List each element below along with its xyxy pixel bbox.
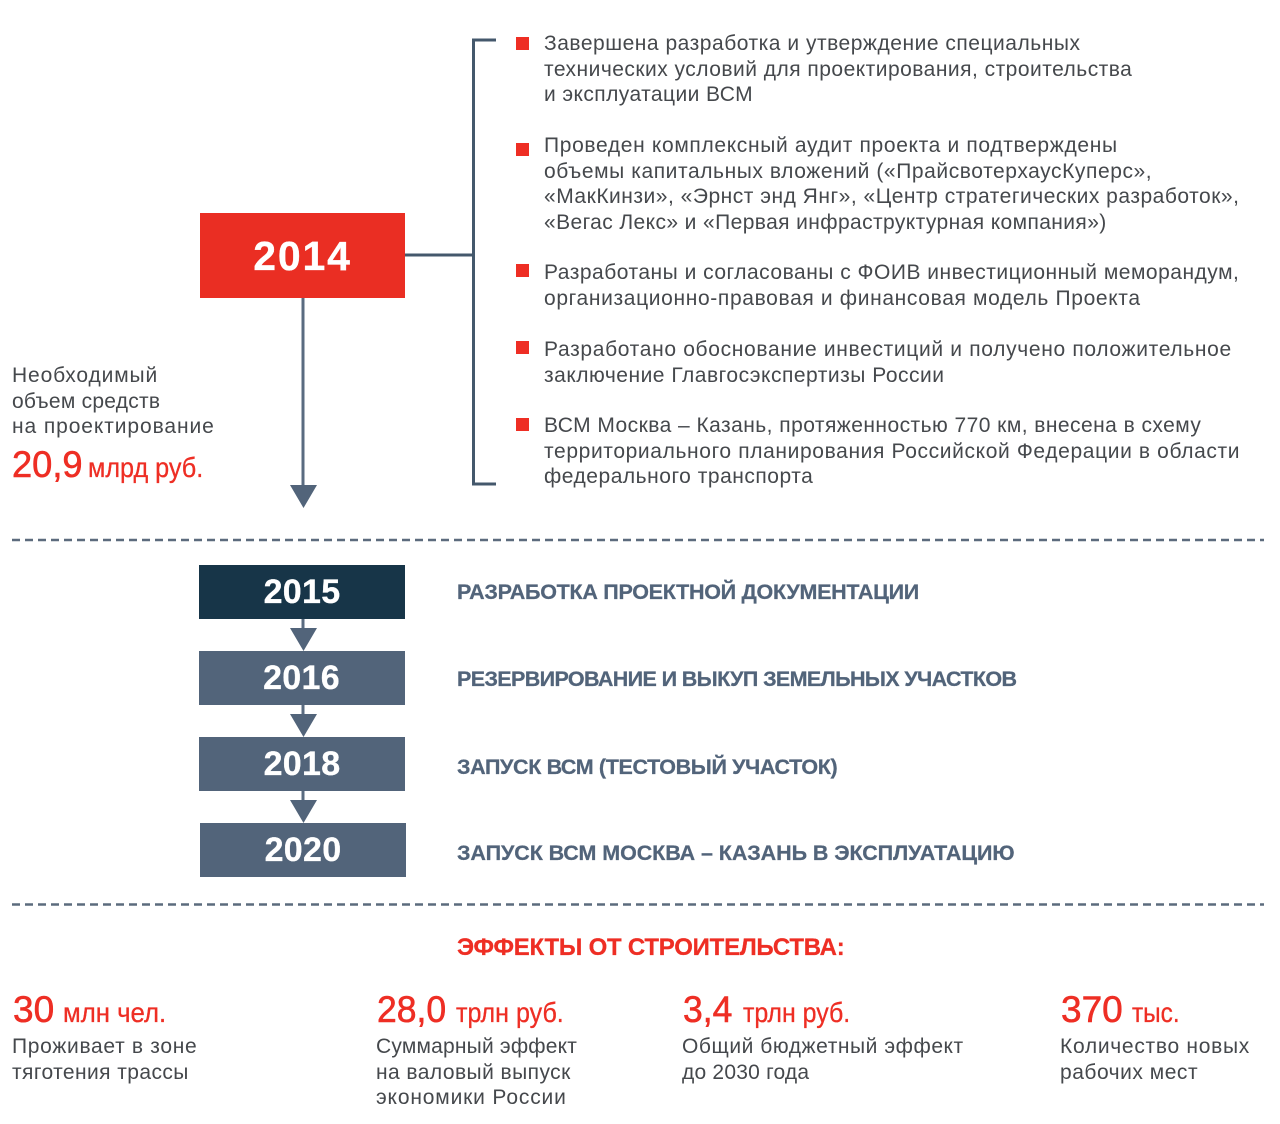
text 5: территориального планирования Российской Федерации в области bbox=[544, 440, 1240, 462]
effect text 2: на валовый выпуск bbox=[376, 1060, 571, 1084]
effect value 4: тыс. bbox=[1132, 997, 1180, 1028]
text 4: заключение Главгосэкспертизы России bbox=[544, 364, 945, 386]
effect text 1: тяготения трассы bbox=[12, 1060, 189, 1084]
effect text 3: Общий бюджетный эффект bbox=[682, 1035, 964, 1058]
milestone 2015: РАЗРАБОТКА ПРОЕКТНОЙ ДОКУМЕНТАЦИИ bbox=[457, 580, 919, 604]
effect text 4: рабочих мест bbox=[1060, 1060, 1198, 1084]
effect value 2: 28,0 bbox=[377, 989, 446, 1030]
text 4: Разработано обоснование инвестиций и получено положительное bbox=[544, 338, 1232, 361]
year box 2018 bbox=[199, 737, 405, 791]
bullet 2 bbox=[516, 143, 528, 156]
year box 2020: 2020 bbox=[265, 831, 341, 869]
effect text 3: до 2030 года bbox=[682, 1060, 809, 1084]
effect text 4 bbox=[1060, 1035, 1250, 1084]
effect value 2: трлн руб. bbox=[456, 997, 564, 1028]
effect text 1 bbox=[12, 1035, 197, 1084]
effect value 2 bbox=[377, 989, 564, 1030]
text 2: объемы капитальных вложений («ПрайсвотерхаусКуперс», bbox=[544, 160, 1152, 182]
bullet 3 bbox=[516, 264, 528, 276]
funding label: Необходимый bbox=[12, 364, 158, 387]
funding label: на проектирование bbox=[12, 415, 215, 438]
effect text 2 bbox=[376, 1035, 577, 1109]
funding label bbox=[12, 364, 215, 438]
effect text 1: Проживает в зоне bbox=[12, 1035, 197, 1058]
effect value 1: млн чел. bbox=[63, 997, 166, 1028]
milestone 2020: ЗАПУСК ВСМ МОСКВА – КАЗАНЬ В ЭКСПЛУАТАЦИЮ bbox=[457, 841, 1014, 865]
text 3: организационно-правовая и финансовая модель Проекта bbox=[544, 286, 1141, 310]
text 2: «Вегас Лекс» и «Первая инфраструктурная компания») bbox=[544, 210, 1107, 234]
text 1: Завершена разработка и утверждение специальных bbox=[544, 32, 1080, 55]
year box 2016 bbox=[198, 651, 404, 705]
effect value 4: 370 bbox=[1061, 989, 1123, 1030]
year box 2016: 2016 bbox=[263, 659, 340, 697]
effect text 2: Суммарный эффект bbox=[376, 1035, 577, 1058]
effect value 1: 30 bbox=[13, 989, 54, 1030]
effect value 3 bbox=[683, 989, 850, 1030]
funding value: 20,9 bbox=[12, 444, 83, 485]
year box 2015: 2015 bbox=[264, 573, 340, 611]
effects heading: ЭФФЕКТЫ ОТ СТРОИТЕЛЬСТВА: bbox=[457, 934, 845, 961]
effect text 2: экономики России bbox=[376, 1086, 567, 1109]
funding value bbox=[12, 444, 203, 485]
effect text 4: Количество новых bbox=[1060, 1035, 1250, 1058]
text 2: «МакКинзи», «Эрнст энд Янг», «Центр стратегических разработок», bbox=[544, 185, 1239, 208]
text 2: Проведен комплексный аудит проекта и подтверждены bbox=[544, 134, 1118, 157]
year box 2020 bbox=[200, 823, 406, 877]
bullet 4 bbox=[516, 341, 528, 354]
effect value 3: 3,4 bbox=[683, 989, 732, 1030]
text 1 bbox=[544, 32, 1132, 106]
year box 2015 bbox=[199, 565, 405, 619]
text 1: и эксплуатации ВСМ bbox=[544, 83, 753, 106]
funding label: объем средств bbox=[12, 390, 160, 412]
text 5: федерального транспорта bbox=[544, 465, 813, 488]
text 3 bbox=[544, 261, 1239, 310]
milestone 2016: РЕЗЕРВИРОВАНИЕ И ВЫКУП ЗЕМЕЛЬНЫХ УЧАСТКОВ bbox=[457, 667, 1016, 691]
effect value 4 bbox=[1061, 989, 1180, 1030]
year box 2018: 2018 bbox=[264, 745, 340, 783]
bullet 5 bbox=[516, 418, 528, 430]
milestone 2018: ЗАПУСК ВСМ (ТЕСТОВЫЙ УЧАСТОК) bbox=[457, 755, 837, 779]
year box 2014: 2014 bbox=[253, 233, 352, 279]
effect value 3: трлн руб. bbox=[743, 997, 850, 1028]
text 3: Разработаны и согласованы с ФОИВ инвестиционный меморандум, bbox=[544, 261, 1239, 284]
year box 2014 bbox=[200, 213, 405, 298]
effect value 1 bbox=[13, 989, 166, 1030]
text 1: технических условий для проектирования, строительства bbox=[544, 58, 1132, 80]
text 5: ВСМ Москва – Казань, протяженностью 770 км, внесена в схему bbox=[544, 414, 1201, 437]
text 2 bbox=[544, 134, 1239, 234]
effect text 3 bbox=[682, 1035, 964, 1084]
text 4 bbox=[544, 338, 1232, 386]
funding value: млрд руб. bbox=[88, 452, 203, 483]
text 5 bbox=[544, 414, 1240, 488]
bullet 1 bbox=[516, 37, 528, 50]
